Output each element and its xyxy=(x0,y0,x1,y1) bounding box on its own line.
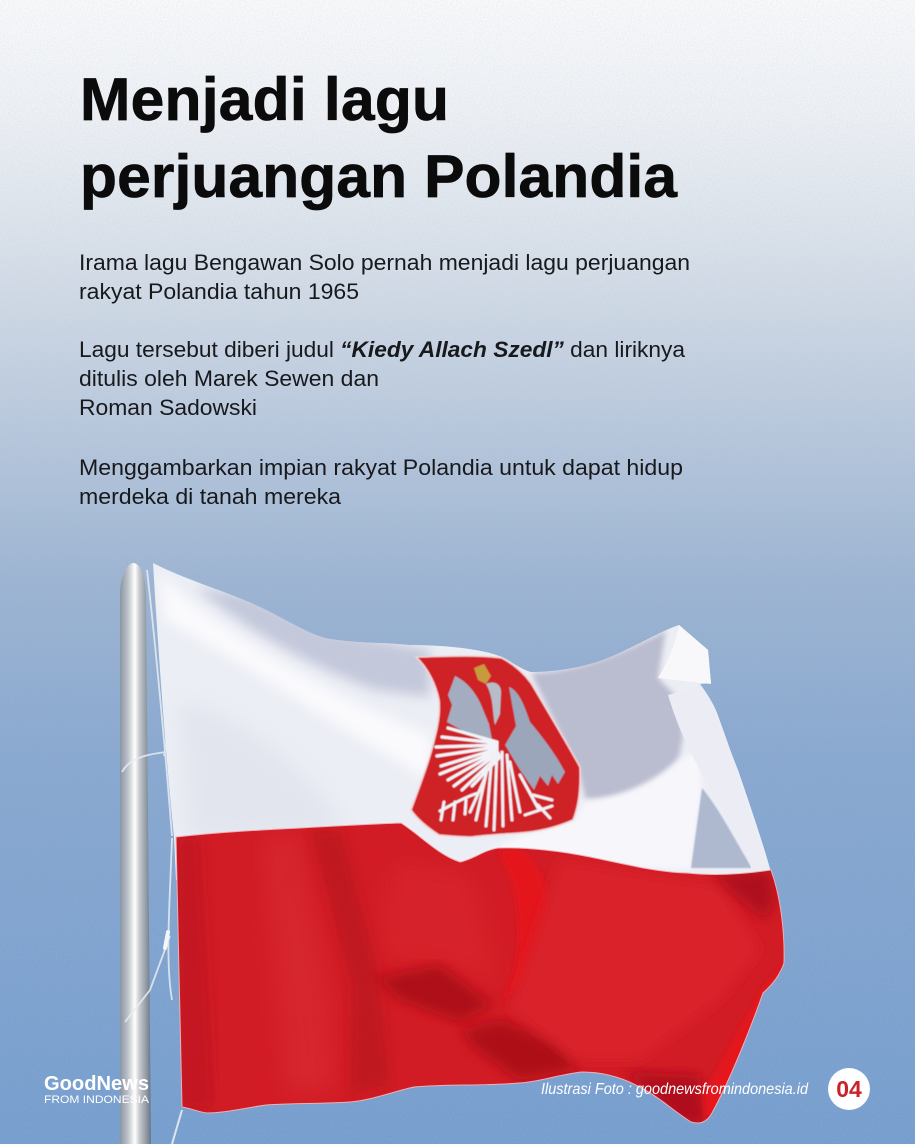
paragraph 1 xyxy=(79,250,690,304)
paragraph 2 xyxy=(79,337,686,420)
page number badge: 04 xyxy=(836,1076,862,1102)
paragraph 2: Lagu tersebut diberi judul “Kiedy Allach Szedl” dan liriknya xyxy=(79,337,686,362)
logo: GoodNews from Indonesia: GoodNews xyxy=(44,1073,149,1095)
flag: coat of arms shield xyxy=(411,656,580,837)
eagle head and neck xyxy=(486,682,501,725)
flag: folded corner xyxy=(658,625,711,684)
title: perjuangan Polandia xyxy=(80,142,678,210)
title xyxy=(80,65,678,210)
flag: red band xyxy=(170,815,790,1135)
paragraph 2: ditulis oleh Marek Sewen dan xyxy=(79,366,379,391)
crown xyxy=(474,664,491,684)
paragraph 2: Roman Sadowski xyxy=(79,395,257,420)
flag: white band xyxy=(153,563,770,880)
paragraph 3: merdeka di tanah mereka xyxy=(79,484,342,509)
paragraph 1: Irama lagu Bengawan Solo pernah menjadi lagu perjuangan xyxy=(79,250,690,275)
title: Menjadi lagu xyxy=(80,65,449,133)
flagpole with halyard rope xyxy=(120,563,182,1144)
eagle left wing white feathers xyxy=(436,728,500,790)
eagle upper left wing xyxy=(447,676,493,745)
Polish flag xyxy=(140,550,790,1135)
logo: GoodNews from Indonesia xyxy=(44,1073,150,1106)
eagle right wing xyxy=(505,687,565,790)
photo credit: Ilustrasi Foto : goodnewsfromindonesia.id xyxy=(541,1081,809,1098)
logo: GoodNews from Indonesia: FROM INDONESIA xyxy=(44,1094,150,1106)
paragraph 1: rakyat Polandia tahun 1965 xyxy=(79,279,359,304)
page number badge xyxy=(828,1068,870,1110)
eagle talons xyxy=(440,775,552,820)
eagle tail feathers xyxy=(470,750,520,830)
paragraph 3 xyxy=(79,455,683,509)
paragraph 3: Menggambarkan impian rakyat Polandia untuk dapat hidup xyxy=(79,455,683,480)
